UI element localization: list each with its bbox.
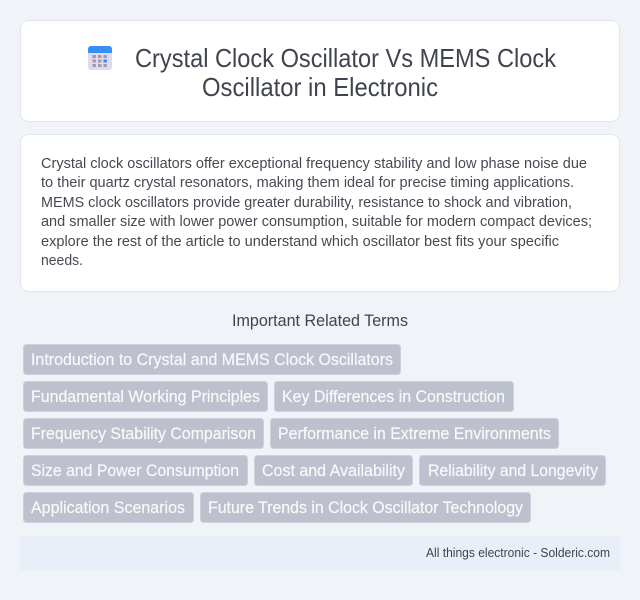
tag: frequency stability	[24, 418, 264, 448]
text block: description paragraph: MEMS clock oscillators provide greater durability, resistance to shock and vibration,	[41, 195, 572, 211]
tag: introduction: Introduction to Crystal and MEMS Clock Oscillators	[31, 350, 393, 369]
tag: frequency stability: Frequency Stability Comparison	[31, 424, 256, 443]
footer: All things electronic - Solderic.com	[426, 546, 610, 560]
icon: calendar	[88, 46, 112, 70]
tag: reliability	[420, 456, 606, 486]
tag: extreme environments: Performance in Extreme Environments	[278, 424, 551, 443]
tag: future trends: Future Trends in Clock Oscillator Technology	[208, 498, 524, 517]
tag: size and power	[24, 456, 248, 486]
tag: cost	[254, 456, 412, 486]
text block: description paragraph: Crystal clock oscillators offer exceptional frequency stability and low phase noise due	[41, 156, 587, 172]
tag: working principles	[24, 382, 268, 412]
text block: description paragraph	[41, 156, 592, 269]
heading: important related terms: Important Related Terms	[232, 312, 408, 330]
tag: future trends	[200, 492, 530, 522]
tag: construction: Key Differences in Construction	[282, 387, 505, 406]
footer	[20, 536, 620, 570]
tag: size and power: Size and Power Consumption	[31, 461, 239, 480]
title: Crystal Clock Oscillator Vs MEMS Clock	[135, 43, 557, 73]
title: Oscillator in Electronic	[202, 72, 438, 102]
tag: working principles: Fundamental Working Principles	[31, 387, 260, 406]
title	[135, 43, 557, 102]
tag: application scenarios	[24, 492, 194, 522]
text block: description paragraph: to their quartz crystal resonators, making them ideal for precise timing applications.	[41, 175, 574, 191]
panel: description	[20, 134, 620, 292]
panel: title card	[20, 20, 620, 122]
panel: related term tags	[24, 344, 606, 522]
tag: extreme environments	[270, 418, 558, 448]
text block: description paragraph: explore the rest of the article to understand which oscillator best fits your specific	[41, 234, 560, 250]
tag: reliability: Reliability and Longevity	[428, 461, 599, 480]
tag: construction	[274, 382, 514, 412]
tag: cost: Cost and Availability	[262, 461, 406, 480]
text block: description paragraph: and smaller size with lower power consumption, suitable for modern compact devices;	[41, 214, 592, 230]
tag: introduction	[24, 344, 400, 374]
text block: description paragraph: needs.	[41, 253, 83, 269]
tag: application scenarios: Application Scenarios	[31, 498, 185, 517]
